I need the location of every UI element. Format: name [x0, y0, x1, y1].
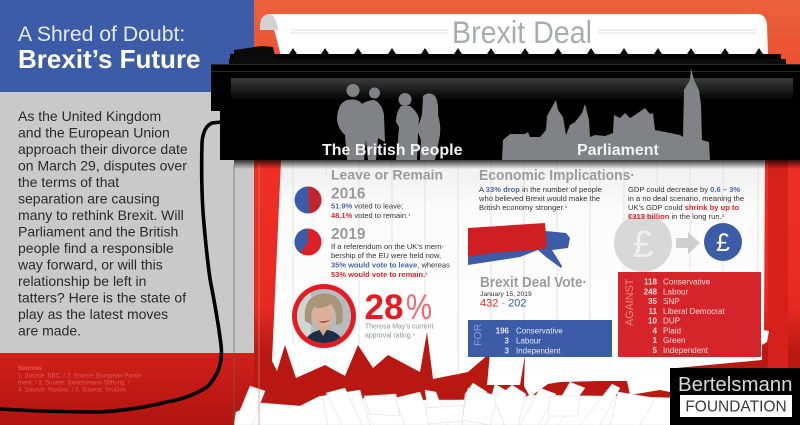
text block: introduction: separation are causing: [18, 190, 160, 206]
shredder shadow: [234, 160, 800, 169]
panel: votes against: Liberal Democrat: [663, 307, 725, 316]
panel: votes for: 196: [496, 326, 510, 336]
text block: sources: 4. Source: YouGov. / 5. Source: YouGov.: [18, 386, 128, 394]
panel: economic implications: [468, 167, 744, 272]
icon: small pound coin: £: [716, 229, 730, 257]
panel: votes against: Plaid: [663, 326, 681, 335]
text block: confidence drop: A 33% drop in the number of people: [479, 185, 602, 194]
heading: leave or remain: Leave or Remain: [331, 166, 443, 182]
label: against: AGAINST: [624, 278, 636, 326]
text block: confidence drop: who believed Brexit would make the: [478, 194, 600, 203]
text block: 2016: 2016: [331, 186, 366, 202]
text block: introduction: way forward, or will this: [17, 256, 163, 272]
text block: 2016: [331, 186, 411, 220]
text block: GDP: [628, 185, 744, 221]
silhouette: parliament: [502, 68, 710, 160]
text block: 2019: bership of the EU were held now,: [331, 251, 441, 260]
text block: confidence drop: [478, 185, 602, 212]
icon: thumbs down: [468, 223, 570, 268]
teeth: [288, 48, 764, 60]
text block: sources: Sources: [18, 365, 43, 372]
stat: approval rating: [364, 288, 434, 340]
panel: votes for: Conservative: [516, 326, 563, 336]
text: vote result: 432 - 202: [480, 298, 527, 310]
panel: votes against: Labour: [663, 287, 689, 296]
logo: Bertelsmann Foundation: FOUNDATION: [685, 398, 787, 416]
text block: 2019: 35% would vote to leave, whereas: [331, 260, 450, 270]
heading: title: Brexit’s Future: [18, 44, 201, 74]
text block: introduction: [17, 108, 188, 338]
pie chart: 2019: [294, 228, 322, 256]
text block: introduction: many to rethink Brexit. Will: [18, 207, 184, 223]
panel: votes against: SNP: [663, 297, 680, 306]
text: approval caption: approval rating.: [365, 332, 413, 340]
text block: 2019: 2019: [331, 226, 366, 243]
panel: leave or remain: [294, 166, 450, 279]
text block: GDP: UK’s GDP could shrink by up to: [628, 203, 739, 212]
text block: 2019: 2: [425, 271, 428, 276]
power cable: [0, 122, 222, 412]
text block: introduction: are made.: [18, 322, 81, 338]
silhouette: the British people: [337, 84, 440, 160]
text block: GDP: GDP could decrease by 0.6 – 3%: [628, 185, 740, 194]
vertical guide lines: [234, 165, 259, 425]
label: parliament: Parliament: [577, 142, 659, 159]
stat: approval rating: 28: [364, 288, 403, 327]
text block: 2019: [331, 226, 450, 279]
text block: 2016: 48.1% voted to remain.: [331, 211, 408, 220]
text block: introduction: the terms of that: [18, 174, 119, 190]
panel: votes against: 10: [648, 317, 657, 326]
text block: introduction: and the European Union: [18, 124, 170, 140]
pie chart: 2016: [294, 186, 322, 214]
shredder machine: [211, 46, 800, 160]
text block: confidence drop: 4: [565, 204, 568, 209]
text block: introduction: on March 29, disputes over: [18, 158, 187, 174]
panel: title: [0, 0, 254, 92]
icon: large pound coin: [614, 214, 672, 272]
shredder face highlight: [231, 78, 793, 101]
text block: sources: [18, 365, 142, 394]
heading: title: A Shred of Doubt:: [18, 23, 185, 46]
stat: approval rating: %: [406, 288, 432, 327]
icon: arrow: [676, 232, 700, 254]
panel: votes against: 35: [648, 297, 657, 306]
text block: introduction: play as the latest moves: [18, 306, 168, 322]
text block: GDP: 3: [722, 213, 725, 218]
panel: votes for: 3: [505, 336, 510, 346]
shred pile: [234, 382, 680, 425]
panel: votes against: 5: [652, 346, 657, 355]
logo: Bertelsmann Foundation: Bertelsmann: [678, 374, 792, 396]
text block: introduction: tatters? Here is the state of: [18, 290, 186, 306]
portrait: Theresa May: [292, 284, 356, 348]
panel: votes against: [618, 272, 761, 357]
panel: votes for: 3: [505, 346, 510, 356]
text block: introduction: relationship be left in: [18, 273, 146, 289]
heading: Brexit Deal: Brexit Deal: [452, 14, 592, 50]
text: approval caption: Theresa May’s current: [365, 324, 434, 330]
heading: title: [18, 23, 201, 74]
text block: GDP: €313 billion in the long run.: [628, 212, 722, 221]
panel: votes against: Green: [663, 336, 686, 345]
text block: sources: ment. / 3. Source: Bertelsmann Stiftung. /: [18, 380, 130, 386]
icon: small pound coin: [704, 223, 742, 261]
panel: votes for: [468, 320, 612, 357]
text block: 2019: If a referendum on the UK’s mem-: [331, 242, 444, 251]
heading: economic implications: Economic Implications·: [479, 167, 635, 184]
icon: large pound coin: £: [632, 224, 654, 266]
strip cut lines: [293, 160, 758, 375]
text block: sources: 1. Source: BBC. / 2. Source: European Parlia-: [18, 372, 142, 380]
text block: introduction: As the United Kingdom: [18, 108, 161, 124]
text block: introduction: people find a responsible: [18, 240, 174, 256]
panel: votes for: Labour: [516, 336, 541, 346]
text block: introduction: Parliament and the British: [18, 224, 178, 240]
panel: votes against: Conservative: [663, 278, 711, 286]
text block: 2019: 53% would vote to remain.: [331, 270, 425, 279]
paper: top sheet: [260, 14, 768, 56]
paper: shredded strips: [272, 160, 769, 397]
panel: votes against: 4: [652, 326, 657, 335]
text block: confidence drop: British economy stronger.: [479, 203, 565, 212]
panel: votes against: 248: [643, 287, 657, 296]
panel: votes against: 1: [652, 336, 657, 345]
panel: votes for: Independent: [516, 346, 561, 356]
label: the British people: The British People: [322, 142, 463, 159]
panel: votes against: 11: [648, 307, 657, 316]
panel: introduction: [0, 92, 254, 353]
panel: votes against: DUP: [663, 317, 680, 326]
logo: Bertelsmann Foundation: [670, 368, 800, 425]
label: for: FOR: [472, 323, 484, 346]
text block: 2016: 1: [408, 212, 411, 217]
panel: Brexit deal vote: [468, 272, 761, 357]
text block: 2016: 51.9% voted to leave;: [331, 202, 403, 210]
text: vote date: January 15, 2019: [480, 291, 532, 298]
text: approval caption: 5: [412, 332, 416, 336]
panel: votes against: Independent: [663, 346, 709, 355]
panel: votes against: 118: [644, 278, 657, 286]
text block: GDP: in a no deal scenario, meaning the: [628, 194, 744, 203]
dark red area behind shreds: [281, 340, 681, 410]
text block: introduction: approach their divorce date: [18, 141, 188, 157]
heading: Brexit deal vote: Brexit Deal Vote·: [480, 275, 587, 291]
